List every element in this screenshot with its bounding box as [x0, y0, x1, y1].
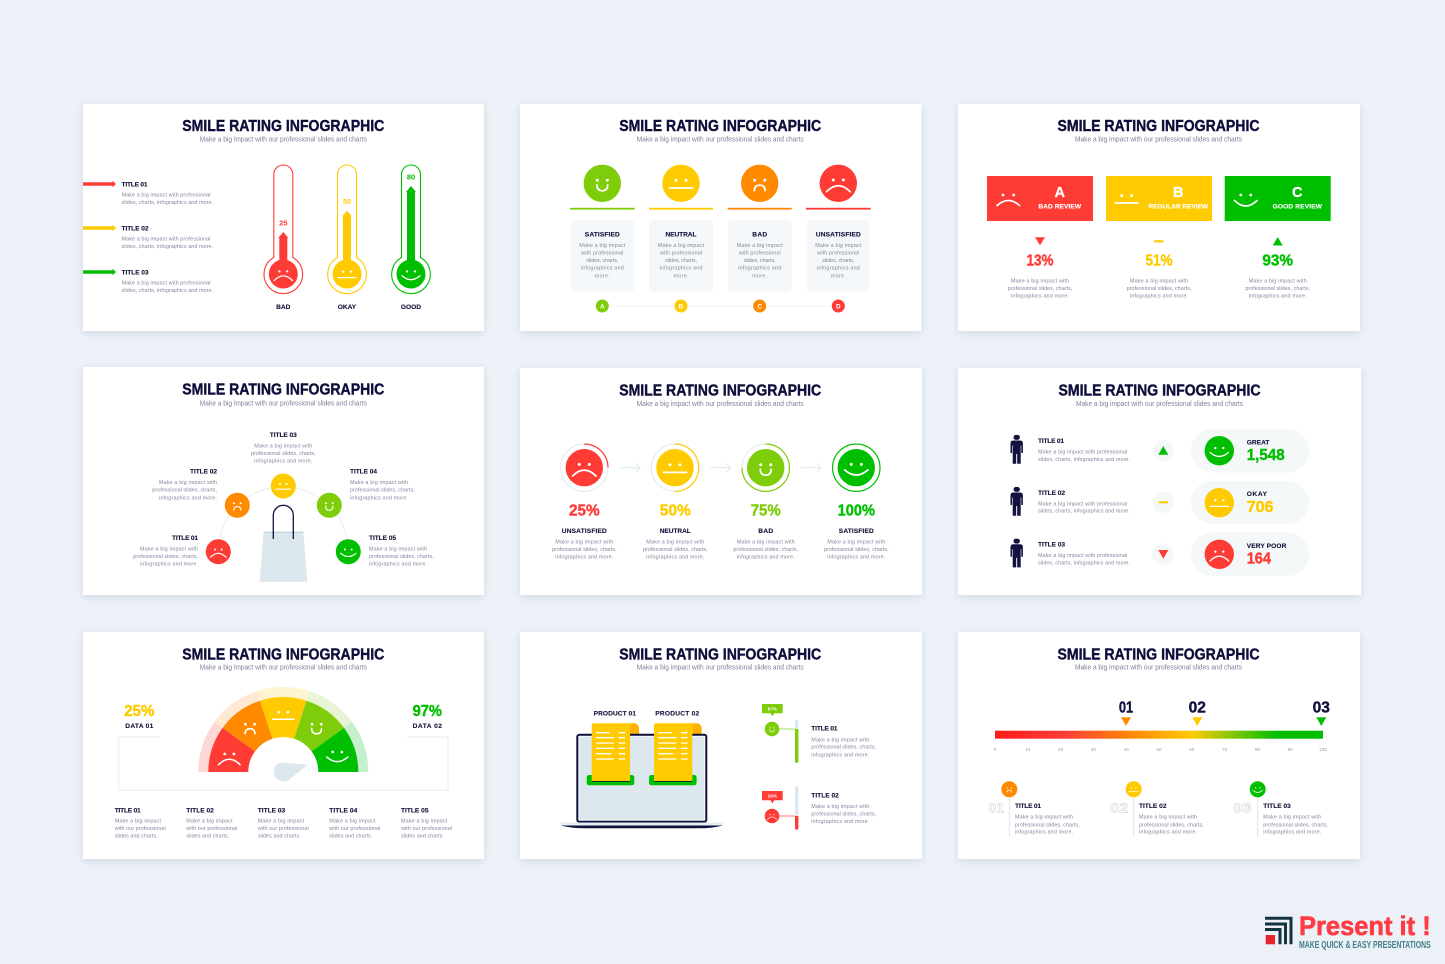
card: bad: infographics and	[738, 266, 781, 272]
text block: title 02: Make a big impact with	[159, 480, 217, 486]
text block: title 03: infographics and more.	[254, 459, 312, 465]
heading: SMILE RATING INFOGRAPHIC	[619, 118, 822, 135]
review: regular: Make a big impact with	[1130, 278, 1188, 284]
text block: title 03	[251, 432, 316, 465]
text block: title 01: TITLE 01	[172, 535, 198, 542]
review: good: infographics and more.	[1249, 294, 1307, 300]
card: satisfied: with professional	[580, 251, 623, 257]
frame line	[119, 737, 448, 790]
stat: data 01	[124, 703, 154, 730]
marker 03	[1313, 700, 1330, 726]
card: neutral: with professional	[659, 251, 702, 257]
marker 01: 01	[1119, 700, 1133, 716]
text block: title 03: with our professional	[257, 826, 309, 832]
rating: 75% bad: BAD	[758, 528, 773, 535]
card: neutral: B	[679, 303, 684, 310]
card: bad: with professional	[738, 251, 781, 257]
card: bad: C	[757, 303, 762, 310]
row: okay: TITLE 02	[1038, 490, 1065, 497]
receipt: product 01	[587, 723, 634, 785]
text block: title 01: with our professional	[114, 826, 166, 832]
text block: title 03: slides and charts.	[258, 834, 301, 840]
panel: people and counts	[958, 368, 1361, 595]
row: great: slides, charts, infographics and more.	[1038, 457, 1130, 463]
text block: title 01	[114, 807, 166, 840]
item 01: TITLE 01	[1015, 803, 1041, 810]
row: great	[1010, 429, 1309, 473]
scale ticks: 10	[1025, 747, 1031, 752]
review: regular: REGULAR REVIEW	[1148, 204, 1209, 211]
text block: title 04: professional slides, charts,	[350, 488, 415, 494]
text block: title 02	[811, 793, 876, 825]
receipt curls	[630, 723, 702, 734]
text block: title 03: professional slides, charts,	[251, 451, 316, 457]
text block: title 04: with our professional	[328, 826, 380, 832]
scale ticks: 50	[1156, 747, 1162, 752]
scale ticks: 80	[1255, 747, 1260, 752]
text block: title 04: Make a big impact	[329, 819, 376, 825]
text block: title 01: infographics and more.	[811, 752, 869, 758]
rating: 100% satisfied: 100%	[838, 502, 875, 520]
scale ticks: 40	[1124, 747, 1129, 752]
text block: title 01: TITLE 01	[122, 181, 148, 188]
rating: 100% satisfied: Make a big impact with	[827, 539, 885, 545]
face 03	[271, 474, 296, 498]
text block: title 01: Make a big impact with	[140, 546, 198, 552]
text block: title 02	[185, 807, 237, 840]
text block: title 03	[122, 269, 213, 294]
card: satisfied: infographics and	[581, 266, 624, 272]
text block: title 03	[257, 807, 309, 840]
card: satisfied: slides, charts,	[586, 258, 619, 264]
rating meter: 26%	[762, 786, 798, 830]
card: satisfied: more.	[595, 273, 610, 279]
gradient bar	[995, 731, 1323, 739]
panel: thermometer rating	[83, 104, 484, 331]
face 01	[206, 539, 231, 564]
row: okay: Make a big impact with professional	[1038, 501, 1127, 507]
text block: title 02: Make a big impact with professional	[122, 237, 210, 243]
text block: title 02: TITLE 02	[811, 793, 839, 800]
panel: review boxes	[958, 104, 1360, 331]
arrow 3	[801, 463, 821, 472]
review: regular: professional slides, charts,	[1127, 286, 1192, 292]
subtitle: Make a big impact with our professional slides and charts	[637, 137, 804, 144]
heading: SMILE RATING INFOGRAPHIC	[182, 118, 385, 135]
stat: data 02: DATA 02	[413, 723, 442, 730]
rating: 25% unsatisfied: 25%	[569, 502, 600, 520]
item 03: 03	[1233, 799, 1252, 815]
card: unsatisfied: UNSATISFIED	[816, 232, 861, 238]
item 03: professional slides, charts,	[1263, 822, 1328, 828]
gauge chart	[198, 687, 368, 772]
scale ticks: 90	[1288, 747, 1293, 752]
logo name: Present it !	[1299, 911, 1431, 941]
scale ticks: 0	[994, 747, 997, 752]
subtitle: Make a big impact with our professional slides and charts	[200, 400, 367, 407]
item 03: TITLE 03	[1263, 803, 1291, 810]
icon: shopping bag	[260, 505, 307, 582]
heading: SMILE RATING INFOGRAPHIC	[1058, 118, 1260, 135]
card: satisfied	[570, 165, 635, 312]
thermometer: bad 25: 25	[279, 218, 287, 227]
text block: title 02: TITLE 02	[190, 469, 217, 476]
item 02: TITLE 02	[1139, 803, 1167, 810]
receipt: product 02	[649, 723, 697, 785]
card: neutral: NEUTRAL	[666, 232, 696, 238]
arrow 1	[620, 463, 640, 472]
text block: title 02: slides and charts.	[186, 834, 229, 840]
subtitle: Make a big impact with our professional slides and charts	[1075, 665, 1242, 672]
card: satisfied: SATISFIED	[585, 232, 620, 238]
card: neutral: more.	[674, 273, 688, 279]
text block: title 02: with our professional	[185, 826, 237, 832]
text block: title 01: slides, charts, infographics and more.	[122, 200, 213, 206]
panel: product reviews on laptop	[520, 632, 922, 859]
card: bad: more.	[752, 273, 767, 279]
card: unsatisfied: Make a big impact	[815, 243, 862, 249]
heading: SMILE RATING INFOGRAPHIC	[1058, 382, 1261, 400]
face 02	[225, 493, 250, 518]
text block: title 01: TITLE 01	[115, 807, 141, 814]
review: bad: 13%	[1026, 252, 1054, 270]
text block: title 02	[122, 225, 213, 250]
card: bad: BAD	[752, 232, 767, 238]
item 03: infographics and more.	[1263, 830, 1321, 836]
marker 02: 02	[1189, 700, 1206, 716]
scale ticks: 70	[1222, 747, 1228, 752]
arrow: title 02	[83, 225, 116, 231]
thermometer: bad 25: BAD	[276, 304, 291, 311]
item 01: infographics and more.	[1015, 830, 1073, 836]
card: unsatisfied: more.	[831, 273, 846, 279]
rating meter: 26%: 26%	[768, 794, 777, 798]
text block: title 01: professional slides, charts,	[811, 745, 876, 751]
card: unsatisfied: with professional	[816, 251, 859, 257]
row: great: 1,548	[1247, 447, 1285, 464]
thermometer: okay 50: 50	[343, 197, 351, 206]
card: bad	[728, 165, 792, 312]
row: great: Make a big impact with professional	[1038, 449, 1127, 455]
item 02: infographics and more.	[1139, 830, 1197, 836]
stat: data 02	[413, 703, 442, 730]
stat: data 02: 97%	[413, 703, 442, 720]
thermometer: good 80	[392, 165, 430, 311]
text block: title 02: Make a big impact	[186, 819, 233, 825]
text block: title 04: slides and charts.	[329, 834, 372, 840]
item 01	[989, 781, 1080, 837]
card: neutral: slides, charts,	[665, 258, 698, 264]
review: regular: 51%	[1146, 252, 1172, 270]
subtitle: Make a big impact with our professional slides and charts	[637, 401, 804, 408]
text block: title 01: professional slides, charts,	[133, 554, 198, 560]
text block: title 03: Make a big impact with professional	[122, 281, 210, 287]
review: bad	[987, 176, 1093, 300]
rating: 25% unsatisfied: professional slides, charts,	[552, 547, 617, 553]
product labels: PRODUCT 02	[655, 711, 700, 718]
text block: title 01: Make a big impact with	[811, 737, 869, 743]
item 02: professional slides, charts,	[1139, 822, 1204, 828]
thermometer: good 80: GOOD	[401, 304, 421, 311]
card: satisfied: A	[600, 303, 605, 310]
text block: title 04	[350, 469, 415, 501]
row: great: GREAT	[1247, 439, 1269, 446]
text block: title 04: Make a big impact with	[350, 480, 408, 486]
thermometer: bad 25	[264, 165, 303, 311]
rating: 25% unsatisfied: Make a big impact with	[555, 539, 613, 545]
item 02: Make a big impact with	[1139, 815, 1197, 821]
item 02: 02	[1110, 799, 1129, 815]
scale ticks	[994, 747, 1327, 752]
scale ticks: 100	[1319, 747, 1327, 752]
thermometer: okay 50: OKAY	[338, 304, 357, 311]
rating: 25% unsatisfied: infographics and more.	[555, 555, 613, 561]
review: good: professional slides, charts,	[1245, 286, 1311, 292]
rating: 75% bad: infographics and more.	[737, 555, 795, 561]
text block: title 04: TITLE 04	[329, 807, 358, 814]
item 02	[1110, 781, 1204, 837]
row: okay: slides, charts, infographics and more.	[1038, 509, 1130, 515]
panel: shopping bag arc	[83, 367, 484, 595]
text block: title 02: infographics and more.	[811, 819, 869, 825]
text block: title 03: TITLE 03	[258, 807, 286, 814]
face 05	[336, 539, 361, 564]
review: regular	[1106, 176, 1212, 300]
text block: title 05: slides and charts.	[401, 834, 444, 840]
row: very poor: VERY POOR	[1247, 543, 1287, 550]
text block: title 01: slides and charts.	[115, 834, 158, 840]
text block: title 01	[133, 535, 198, 568]
row: great: TITLE 01	[1038, 438, 1064, 445]
text block: title 02: slides, charts, infographics and more.	[122, 244, 213, 250]
panel: progress rings	[520, 368, 922, 595]
rating: 75% bad: Make a big impact with	[737, 539, 795, 545]
item 03	[1233, 781, 1328, 837]
arrow: title 01	[83, 181, 116, 187]
subtitle: Make a big impact with our professional slides and charts	[200, 665, 367, 672]
text block: title 01: infographics and more.	[140, 562, 198, 568]
subtitle: Make a big impact with our professional slides and charts	[1075, 137, 1242, 144]
rating: 25% unsatisfied: UNSATISFIED	[562, 528, 607, 535]
rating meter: 87%	[762, 704, 798, 763]
product labels	[594, 711, 700, 718]
arc connector	[218, 487, 348, 552]
text block: title 05: with our professional	[400, 826, 452, 832]
logo: Present it	[1265, 911, 1431, 951]
heading: SMILE RATING INFOGRAPHIC	[182, 382, 385, 399]
text block: title 05: Make a big impact with	[369, 546, 427, 552]
text block: title 03: TITLE 03	[270, 432, 297, 439]
rating: 100% satisfied	[824, 444, 889, 561]
review: regular: B	[1173, 185, 1184, 201]
text block: title 02	[152, 469, 218, 501]
rating: 100% satisfied: infographics and more.	[827, 555, 885, 561]
text block: title 05: TITLE 05	[401, 807, 429, 814]
text block: title 05	[369, 535, 434, 568]
heading: SMILE RATING INFOGRAPHIC	[619, 382, 822, 400]
text block: title 02: professional slides, charts,	[811, 812, 876, 818]
panel: gradient scale	[958, 632, 1360, 859]
scale ticks: 30	[1091, 747, 1096, 752]
review: good	[1225, 176, 1331, 300]
review: good: Make a big impact with	[1249, 278, 1307, 284]
rating: 75% bad: professional slides, charts,	[733, 547, 799, 553]
connector line	[602, 305, 838, 307]
text block: title 03: TITLE 03	[122, 269, 149, 276]
rating meter: 87%: 87%	[768, 706, 777, 712]
card: satisfied: Make a big impact	[579, 243, 626, 249]
review: bad: BAD REVIEW	[1038, 204, 1082, 211]
review: bad: Make a big impact with	[1011, 278, 1069, 284]
face 04	[317, 493, 342, 518]
text block: title 04	[328, 807, 380, 840]
card: neutral: infographics and	[660, 266, 702, 272]
scale ticks: 60	[1189, 747, 1195, 752]
product labels: PRODUCT 01	[594, 711, 636, 718]
card: unsatisfied: D	[836, 303, 841, 310]
item 01: Make a big impact with	[1015, 815, 1073, 821]
text block: title 03: Make a big impact	[258, 819, 304, 825]
review: bad: infographics and more.	[1011, 294, 1069, 300]
rating: 50% neutral: NEUTRAL	[660, 528, 691, 535]
item 01: 01	[989, 799, 1004, 815]
review: good: C	[1292, 185, 1303, 201]
text block: title 02: TITLE 02	[186, 807, 214, 814]
rating: 50% neutral	[643, 444, 708, 561]
card: bad: Make a big impact	[737, 243, 783, 249]
card: unsatisfied: slides, charts,	[822, 258, 855, 264]
text block: title 01: TITLE 01	[811, 726, 838, 733]
text block: title 04: infographics and more.	[350, 495, 408, 501]
thermometer: okay 50	[328, 165, 366, 311]
review: regular: infographics and more.	[1130, 294, 1188, 300]
rating: 75% bad	[733, 444, 799, 561]
heading: SMILE RATING INFOGRAPHIC	[619, 646, 822, 664]
rating: 50% neutral: 50%	[660, 502, 691, 520]
row: okay	[1010, 481, 1309, 524]
text block: title 05: TITLE 05	[369, 535, 396, 542]
row: okay: 706	[1247, 499, 1273, 516]
text block: title 05	[400, 807, 452, 840]
review: good: GOOD REVIEW	[1273, 204, 1323, 211]
text block: title 02: Make a big impact with	[811, 804, 869, 810]
arrow: title 03	[83, 269, 116, 275]
rating: 100% satisfied: SATISFIED	[839, 528, 874, 535]
heading: SMILE RATING INFOGRAPHIC	[182, 646, 385, 664]
text block: title 05: infographics and more.	[369, 562, 427, 568]
subtitle: Make a big impact with our professional slides and charts	[1076, 401, 1243, 408]
row: very poor: TITLE 03	[1038, 542, 1065, 549]
text block: title 05: professional slides, charts,	[369, 554, 434, 560]
laptop	[561, 735, 723, 828]
card: bad: slides, charts,	[744, 258, 776, 264]
text block: title 01: Make a big impact	[115, 819, 162, 825]
scale ticks: 20	[1058, 747, 1064, 752]
card: unsatisfied	[806, 165, 871, 312]
rating: 25% unsatisfied	[552, 444, 617, 561]
item 03: Make a big impact with	[1263, 815, 1321, 821]
text block: title 01	[122, 181, 213, 206]
gauge needle	[274, 762, 308, 782]
text block: title 03: slides, charts, infographics and more.	[122, 288, 213, 294]
panel: gauge	[83, 632, 484, 859]
text block: title 02: professional slides, charts,	[152, 488, 218, 494]
stat: data 01: 25%	[124, 703, 154, 720]
review: bad: A	[1054, 185, 1065, 201]
rating: 100% satisfied: professional slides, charts,	[824, 547, 889, 553]
subtitle: Make a big impact with our professional slides and charts	[637, 665, 804, 672]
card: unsatisfied: infographics and	[817, 266, 860, 272]
heading: SMILE RATING INFOGRAPHIC	[1058, 646, 1260, 664]
review: bad: professional slides, charts,	[1008, 286, 1073, 292]
row: very poor: Make a big impact with professional	[1038, 553, 1127, 559]
row: very poor: 164	[1247, 550, 1271, 568]
arrow 2	[710, 463, 730, 472]
rating: 50% neutral: professional slides, charts,	[643, 547, 708, 553]
text block: title 02: infographics and more.	[159, 495, 217, 501]
text block: title 03: Make a big impact with	[254, 443, 312, 449]
rating: 75% bad: 75%	[751, 502, 781, 520]
subtitle: Make a big impact with our professional slides and charts	[200, 137, 367, 144]
rating: 50% neutral: infographics and more.	[646, 555, 704, 561]
marker 02	[1189, 700, 1206, 726]
text block: title 04: TITLE 04	[350, 469, 377, 476]
item 01: professional slides, charts,	[1015, 822, 1080, 828]
row: okay: OKAY	[1247, 491, 1268, 498]
row: very poor	[1010, 532, 1309, 576]
card: neutral	[649, 165, 713, 312]
rating: 50% neutral: Make a big impact with	[646, 539, 704, 545]
text block: title 01: Make a big impact with professional	[122, 193, 210, 199]
text block: title 01	[811, 726, 876, 758]
icon: logo mark	[1265, 918, 1291, 944]
text block: title 05: Make a big impact	[401, 819, 448, 825]
marker 03: 03	[1313, 700, 1330, 716]
row: very poor: slides, charts, infographics and more.	[1038, 560, 1130, 566]
text block: title 02: TITLE 02	[122, 225, 149, 232]
panel: four satisfaction cards	[520, 104, 922, 331]
thermometer: good 80: 80	[407, 172, 415, 181]
stat: data 01: DATA 01	[125, 723, 154, 730]
card: neutral: Make a big impact	[658, 243, 704, 249]
marker 01	[1119, 700, 1133, 726]
review: good: 93%	[1262, 252, 1293, 270]
